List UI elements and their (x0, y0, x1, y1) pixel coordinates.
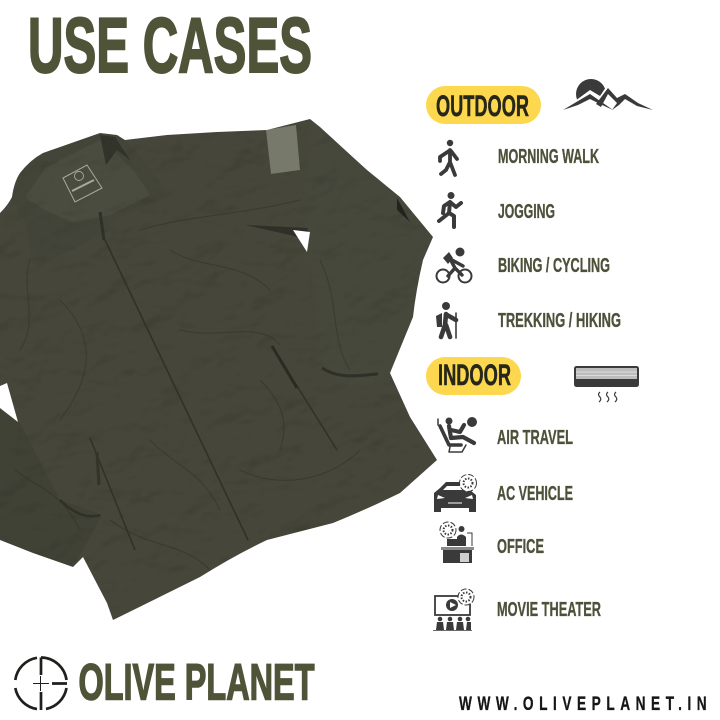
icon: mountains and sun (560, 79, 656, 112)
collar inside (12, 133, 168, 268)
label: biking: BIKING / CYCLING (498, 255, 610, 277)
icon: trekking (436, 302, 456, 338)
label: morning walk: MORNING WALK (498, 146, 599, 168)
icon: cycling (436, 248, 472, 282)
label: jogging: JOGGING (498, 201, 555, 223)
icon: olive planet logo mark (15, 658, 67, 710)
pocket zippers (293, 378, 338, 450)
icon: jogging (439, 192, 461, 227)
jacket body (0, 110, 440, 630)
sleeve velcro patch (266, 125, 300, 174)
outdoor badge (426, 86, 541, 124)
indoor badge (426, 357, 521, 395)
panel: indoor (426, 357, 639, 630)
label: office: OFFICE (497, 536, 544, 558)
wrinkles (15, 200, 360, 570)
label: air travel: AIR TRAVEL (497, 427, 573, 449)
icon: walking (440, 140, 457, 175)
icon: movie theater (433, 589, 474, 630)
title: USE CASES (28, 1, 312, 89)
icon: office (440, 522, 474, 563)
label: ac vehicle: AC VEHICLE (497, 483, 573, 505)
outdoor badge: OUTDOOR (436, 90, 529, 123)
icon: air conditioner (574, 366, 639, 402)
sleeve shading (307, 119, 433, 385)
icon: air travel (438, 417, 477, 452)
jacket photo (0, 110, 440, 630)
collar label (63, 165, 102, 202)
cuffs (322, 368, 378, 376)
brand name: OLIVE PLANET (78, 654, 314, 710)
panel: outdoor (426, 79, 656, 338)
indoor badge: INDOOR (438, 359, 511, 392)
crumple texture (0, 110, 440, 630)
main zipper (105, 240, 248, 540)
label: trekking: TREKKING / HIKING (498, 310, 621, 332)
website: WWW.OLIVEPLANET.IN (459, 693, 707, 715)
label: movie theater: MOVIE THEATER (497, 599, 601, 621)
icon: ac vehicle (434, 474, 476, 512)
armpit gap (293, 230, 310, 252)
